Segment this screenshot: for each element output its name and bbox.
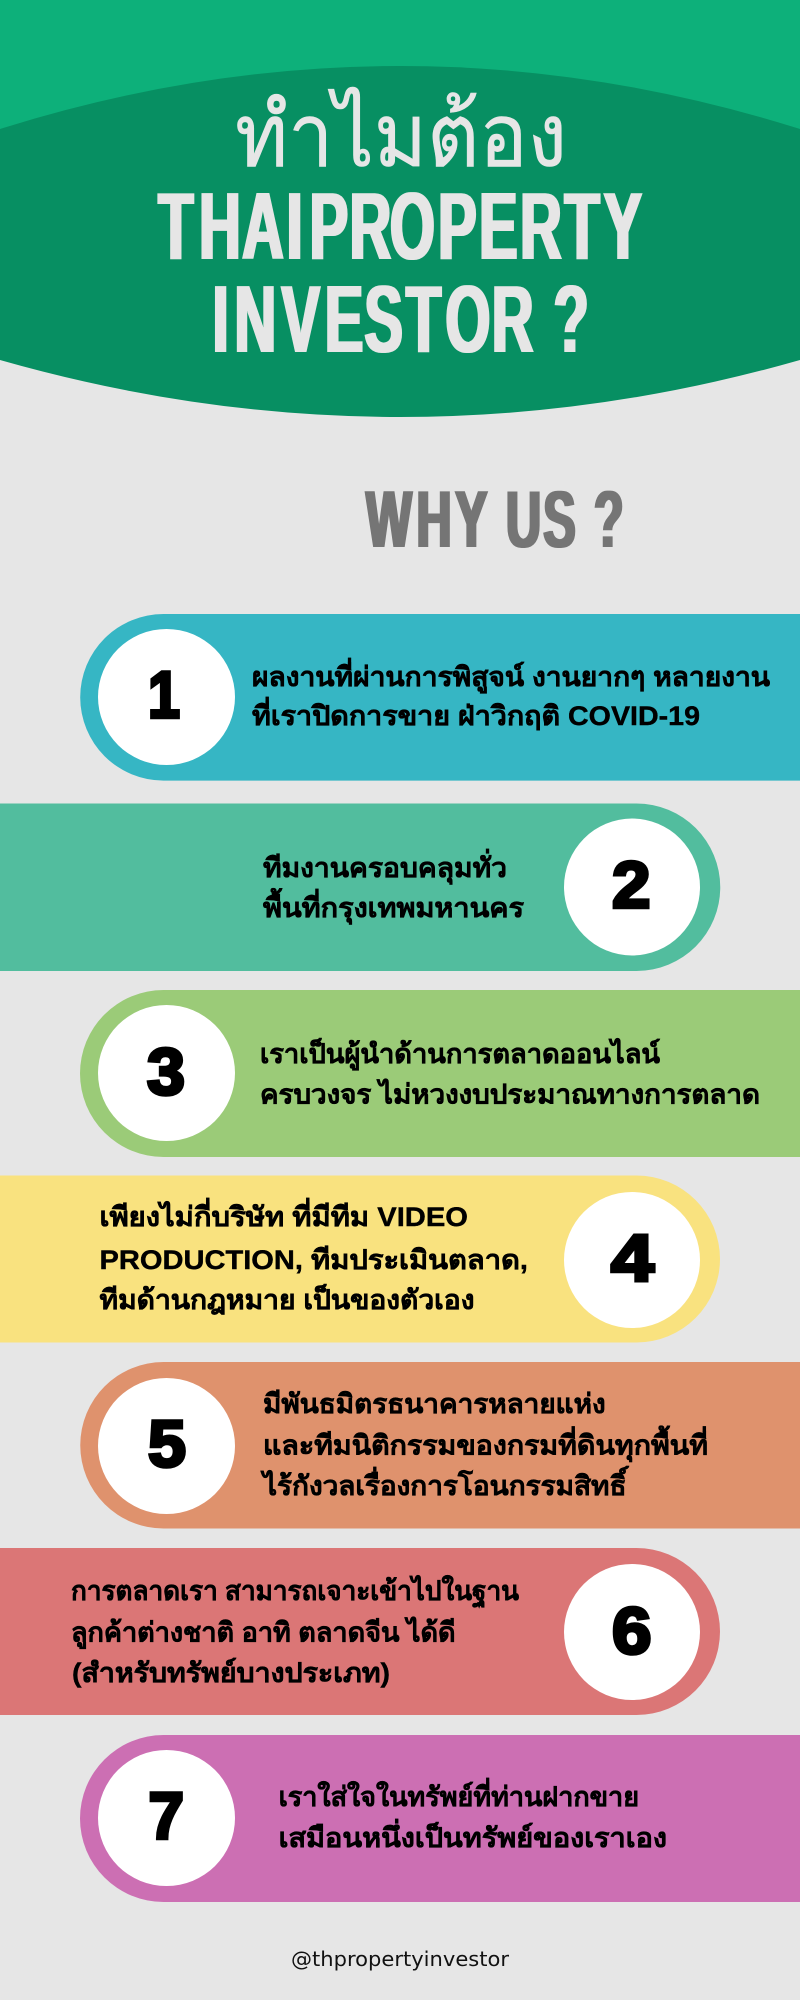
title: ทำไมต้อง xyxy=(235,86,567,185)
item 1: ที่เราปิดการขาย ฝ่าวิกฤติ COVID-19 xyxy=(252,696,700,731)
item 1 xyxy=(80,614,800,781)
item 6: ลูกค้าต่างชาติ อาทิ ตลาดจีน ได้ดี xyxy=(71,1616,456,1650)
item 6: การตลาดเรา สามารถเจาะเข้าไปในฐาน xyxy=(71,1575,520,1609)
item 7: เราใส่ใจในทรัพย์ที่ท่านฝากขาย xyxy=(279,1777,639,1812)
item 4: PRODUCTION, ทีมประเมินตลาด, xyxy=(100,1245,528,1275)
item 4: เพียงไม่กี่บริษัท ที่มีทีม VIDEO xyxy=(100,1197,468,1232)
title: INVESTOR ? xyxy=(213,265,589,373)
item 6: 6 xyxy=(612,1594,652,1668)
item 3: ครบวงจร ไม่หวงงบประมาณทางการตลาด xyxy=(260,1078,760,1110)
item 2: พื้นที่กรุงเทพมหานคร xyxy=(263,887,525,925)
item 2 xyxy=(0,804,720,971)
item 4: ทีมด้านกฎหมาย เป็นของตัวเอง xyxy=(100,1282,474,1315)
item 7: เสมือนหนึ่งเป็นทรัพย์ของเราเอง xyxy=(279,1818,667,1853)
item 1: 1 xyxy=(148,658,180,732)
item 1: ผลงานที่ผ่านการพิสูจน์ งานยากๆ หลายงาน xyxy=(252,657,771,694)
item 4: 4 xyxy=(611,1220,654,1294)
item 2: 2 xyxy=(612,848,650,922)
subheading: why us: WHY US ? xyxy=(366,475,624,565)
title: THAIPROPERTY xyxy=(158,172,642,280)
title xyxy=(158,86,642,373)
item 2: ทีมงานครอบคลุมทั่ว xyxy=(263,848,507,885)
item 3: 3 xyxy=(147,1034,185,1108)
item 5: ไร้กังวลเรื่องการโอนกรรมสิทธิ์ xyxy=(260,1466,629,1501)
item 6: (สำหรับทรัพย์บางประเภท) xyxy=(72,1657,390,1688)
item 5: มีพันธมิตรธนาคารหลายแห่ง xyxy=(263,1389,606,1419)
item 7 xyxy=(80,1735,800,1902)
header band xyxy=(0,0,800,417)
item 5 xyxy=(80,1362,800,1528)
item 3 xyxy=(80,990,800,1157)
item 5: และทีมนิติกรรมของกรมที่ดินทุกพื้นที่ xyxy=(263,1425,708,1463)
item 3: เราเป็นผู้นำด้านการตลาดออนไลน์ xyxy=(260,1036,661,1071)
item 4 xyxy=(0,1176,720,1342)
item 7: 7 xyxy=(148,1778,184,1852)
footer handle: @thpropertyinvestor xyxy=(291,1947,510,1971)
item 6 xyxy=(0,1548,720,1715)
item 5: 5 xyxy=(148,1406,186,1480)
